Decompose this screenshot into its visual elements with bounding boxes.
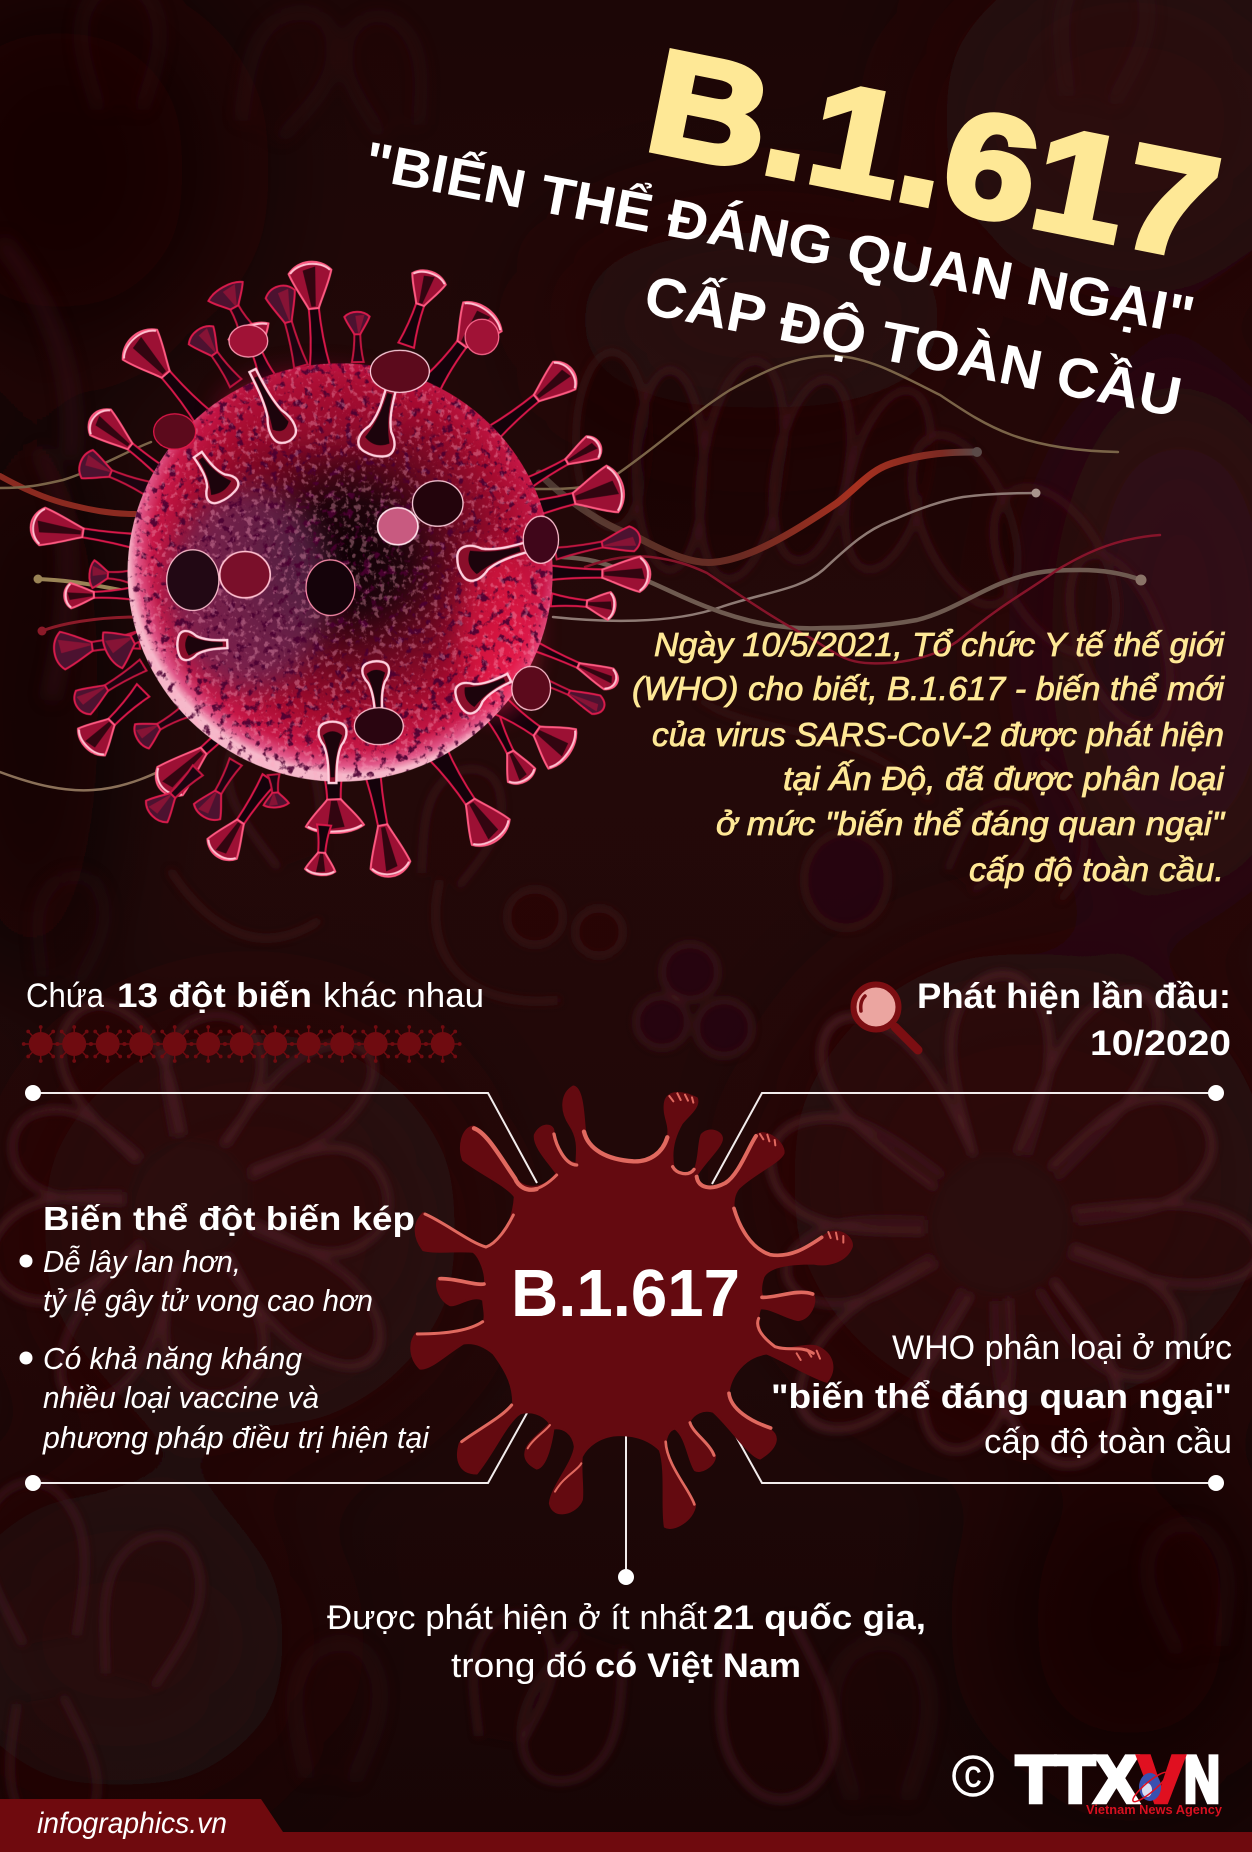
fact: 13 mutations: Chứa <box>26 977 104 1015</box>
icon: 3D coronavirus illustration <box>28 260 651 880</box>
ghost virus right <box>755 972 1252 1480</box>
logo: TTXVN <box>1016 1742 1223 1817</box>
intro text block: cấp độ toàn cầu. <box>969 852 1224 889</box>
logo: TTXVN: TTX <box>1016 1742 1138 1816</box>
intro text block <box>632 627 1226 889</box>
fact: 13 mutations <box>26 977 484 1015</box>
subtitle: "BIẾN THỂ ĐÁNG QUAN NGẠI" <box>360 131 1199 346</box>
virus body <box>128 363 553 782</box>
fact: first detected: 10/2020 <box>1090 1024 1231 1063</box>
center label: B.1.617: B.1.617 <box>511 1256 740 1331</box>
subtitle: CẤP ĐỘ TOÀN CẦU <box>640 263 1187 429</box>
trefoil and blobs <box>170 832 888 1056</box>
fact: detected in 21 countries: trong đó <box>451 1647 587 1685</box>
bullet list: tỷ lệ gây tử vong cao hơn <box>43 1284 373 1318</box>
icon: copyright <box>954 1757 992 1795</box>
ghost shapes lower <box>0 715 1045 1844</box>
outer spikes <box>28 260 651 880</box>
bullet list: nhiều loại vaccine và <box>43 1381 319 1415</box>
bullet list: phương pháp điều trị hiện tại <box>42 1421 430 1455</box>
logo: TTXVN: N <box>1184 1742 1220 1816</box>
heading: double mutant: Biến thể đột biến kép <box>43 1200 415 1237</box>
bullet list <box>20 1244 430 1455</box>
logo: TTXVN: Vietnam News Agency <box>1086 1802 1223 1817</box>
icon: magnifying glass <box>854 984 918 1050</box>
surface spikes <box>154 319 559 783</box>
icon: copyright: C <box>964 1761 982 1794</box>
fact: WHO classification: WHO phân loại ở mức <box>892 1329 1232 1367</box>
fact: detected in 21 countries: Được phát hiện ở ít nhất <box>327 1599 708 1637</box>
fact: WHO classification: "biến thể đáng quan ngại" <box>771 1378 1232 1416</box>
virus highlights <box>417 1093 843 1504</box>
connector lines <box>25 1085 1224 1585</box>
fact: 13 mutations: 13 đột biến <box>117 977 312 1015</box>
decorative wave lines <box>0 356 1160 790</box>
intro text block: Ngày 10/5/2021, Tổ chức Y tế thế giới <box>654 627 1226 664</box>
intro text block: ở mức "biến thể đáng quan ngại" <box>716 806 1226 843</box>
fact: first detected <box>917 977 1231 1063</box>
bullet list: Dễ lây lan hơn, <box>43 1244 241 1279</box>
intro text block: (WHO) cho biết, B.1.617 - biến thể mới <box>632 671 1226 708</box>
ghost virus left <box>0 986 402 1419</box>
subtitle <box>360 131 1199 429</box>
fact: detected in 21 countries <box>327 1599 926 1685</box>
row of 13 mini virus icons <box>22 1025 462 1063</box>
footer band <box>0 1799 1252 1852</box>
fact: detected in 21 countries: có Việt Nam <box>595 1647 801 1685</box>
fact: WHO classification <box>771 1329 1232 1461</box>
title: B.1.617: B.1.617 <box>636 19 1231 291</box>
logo: TTXVN: V <box>1138 1742 1184 1816</box>
intro text block: tại Ấn Độ, đã được phân loại <box>783 760 1226 798</box>
fact: WHO classification: cấp độ toàn cầu <box>984 1423 1232 1461</box>
footer site name: infographics.vn <box>37 1807 227 1840</box>
intro text block: của virus SARS-CoV-2 được phát hiện <box>652 717 1224 754</box>
fact: detected in 21 countries: 21 quốc gia, <box>713 1599 926 1637</box>
central virus shape <box>411 1087 852 1528</box>
fact: 13 mutations: khác nhau <box>323 977 484 1015</box>
fact: double mutant variant <box>20 1200 430 1455</box>
fact: first detected: Phát hiện lần đầu: <box>917 977 1231 1016</box>
bullet list: Có khả năng kháng <box>43 1342 302 1376</box>
